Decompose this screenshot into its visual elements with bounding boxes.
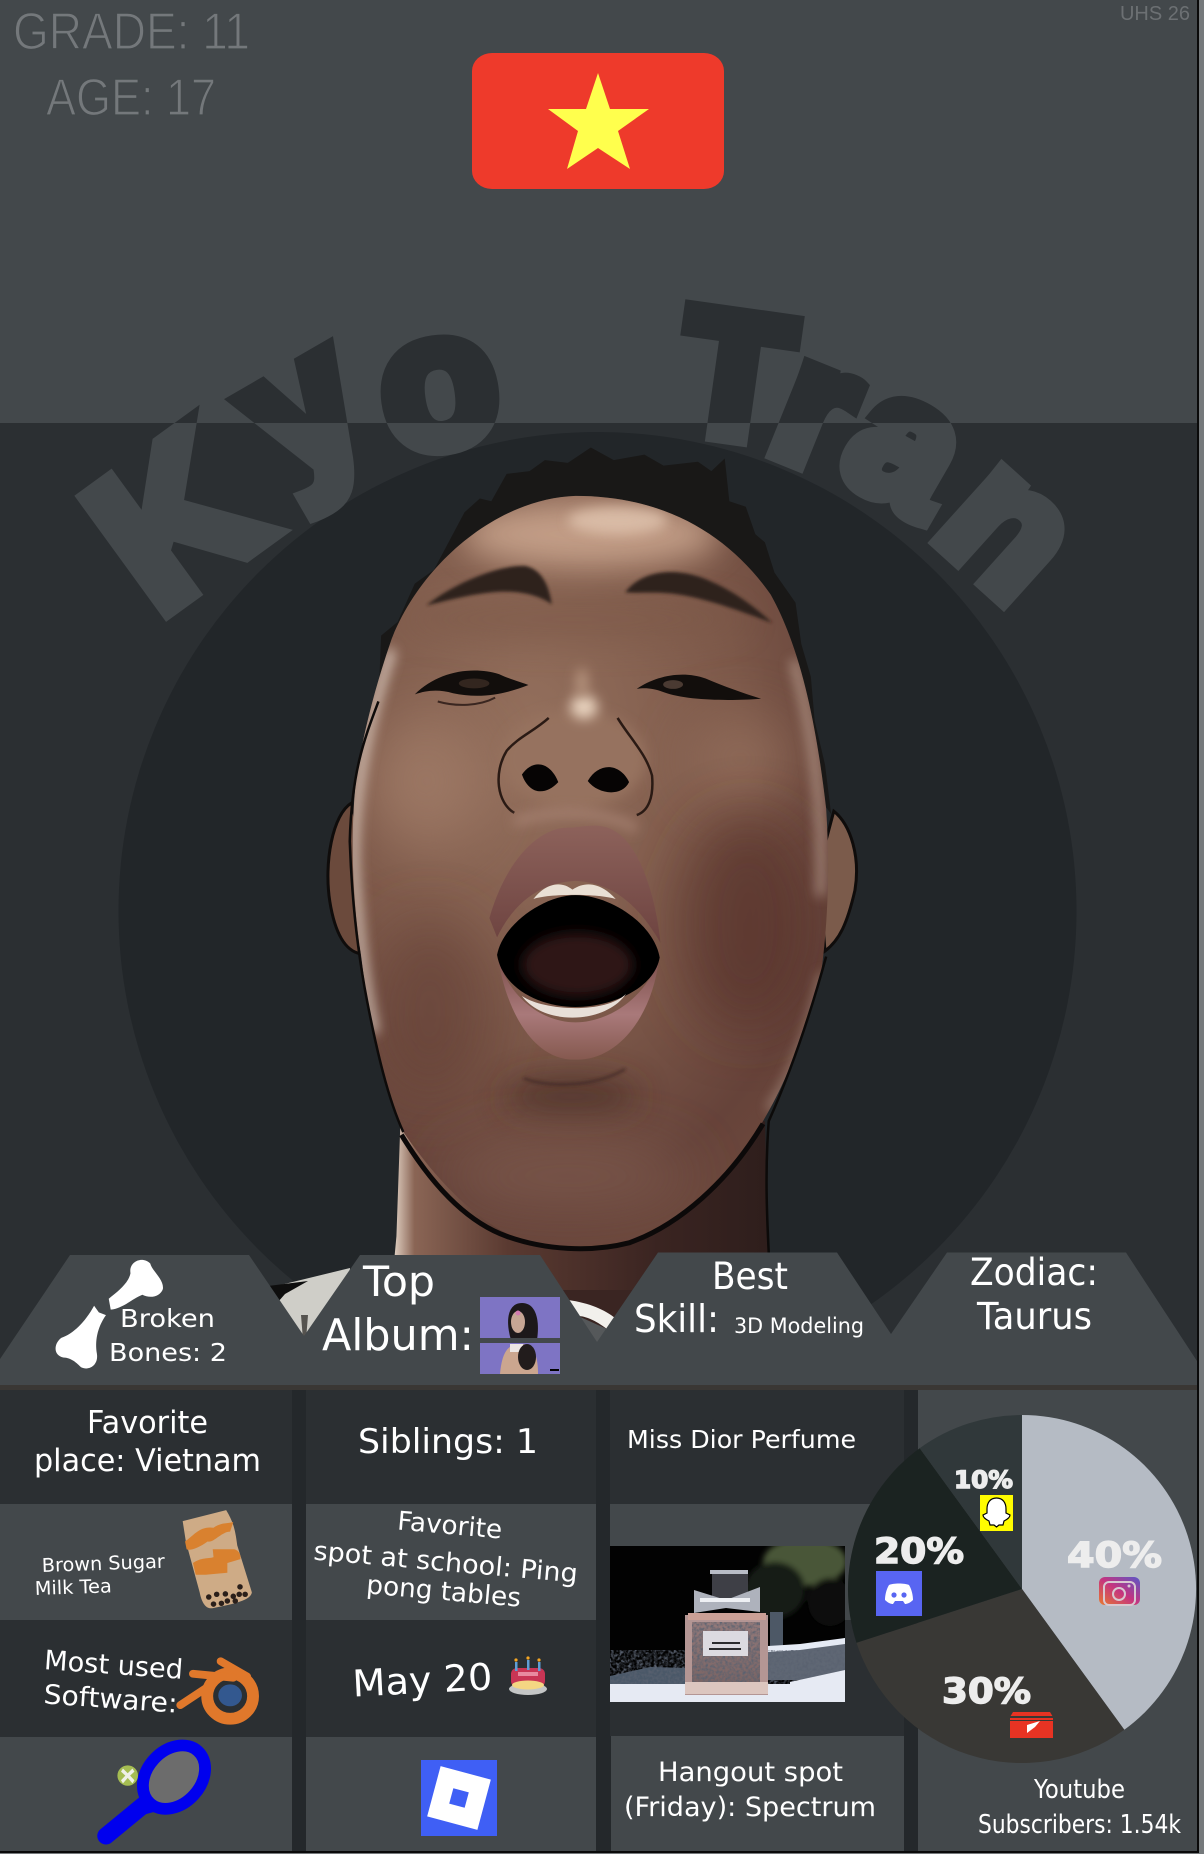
grid cell: hangout spot: Hangout spot (658, 1757, 843, 1788)
neck (392, 1121, 773, 1329)
tab: top album: Top (362, 1257, 435, 1306)
label: 30%: 30% (942, 1672, 1031, 1712)
icon: blender logo (180, 1661, 253, 1719)
shirt (268, 1268, 640, 1345)
youtube subscribers caption (978, 1775, 1181, 1840)
tab: best skill: Best (712, 1255, 788, 1298)
grid cell: favorite spot: Favorite (396, 1507, 503, 1546)
grid cell: birthday (306, 1620, 596, 1737)
icon: Discord (876, 1571, 922, 1616)
grid cell: milk tea: Milk Tea (34, 1575, 112, 1600)
curved name: Kyo Tran: y (204, 290, 397, 521)
tab: broken bones: Bones: 2 (109, 1338, 227, 1367)
grid cell: most used software: Software: (43, 1679, 179, 1720)
portrait: stylised face (328, 448, 857, 1329)
grid cell: favorite spot: pong tables (365, 1570, 522, 1614)
tab: top album (322, 1257, 560, 1374)
grid cell: birthday: May 20 (351, 1655, 493, 1706)
pie chart: social media use (848, 1415, 1196, 1763)
right frame line (1197, 0, 1199, 1853)
face shading (354, 500, 822, 1209)
upper lip (489, 826, 660, 943)
grid cell: perfume name: Miss Dior Perfume (627, 1425, 856, 1454)
upper background panel (0, 0, 1198, 423)
face outline (350, 701, 403, 1132)
grid cell: milk tea: Brown Sugar (41, 1551, 165, 1577)
tab: zodiac: Zodiac: (970, 1251, 1098, 1294)
jaw line (401, 1124, 763, 1249)
tab: broken bones: Broken (120, 1304, 215, 1333)
tab: best skill (634, 1255, 864, 1341)
label: 20%: 20% (874, 1532, 964, 1572)
grid cell: most used software: Most used (43, 1645, 184, 1686)
grid cell: favorite place: place: Vietnam (34, 1443, 261, 1479)
grid cell: roblox (306, 1737, 596, 1851)
youtube subscribers caption: Youtube (1033, 1775, 1125, 1805)
curved name: Kyo Tran: a (815, 331, 1004, 556)
icon: Vietnam flag (472, 53, 724, 189)
icon: broken bones (56, 1260, 163, 1368)
icon: boba cup (183, 1510, 252, 1608)
right neck edge (767, 957, 826, 1253)
grid cell: perfume photo (610, 1504, 870, 1702)
school year tag: UHS 26 (1120, 3, 1190, 25)
tab: broken bones (109, 1304, 227, 1367)
grid cell: pie background (918, 1390, 1197, 1851)
bottom frame line (0, 1851, 1199, 1853)
nose (499, 668, 652, 815)
grid cell: siblings: Siblings: 1 (358, 1422, 538, 1462)
mouth interior (497, 895, 660, 1007)
label: 10%: 10% (954, 1466, 1013, 1494)
tab band (0, 1252, 1197, 1385)
grid cell: tennis (0, 1733, 292, 1851)
left ear (328, 803, 367, 954)
icon: YouTube (1010, 1712, 1053, 1738)
icon: cake (509, 1656, 547, 1695)
grid cell: favorite place (0, 1390, 292, 1504)
grid cell: hangout spot: (Friday): Spectrum (624, 1792, 876, 1823)
left eye (415, 670, 528, 705)
curved name: Kyo Tran: T (668, 272, 802, 481)
slice: Discord 20% (848, 1448, 1022, 1643)
right eye (637, 675, 761, 700)
hair (378, 448, 831, 814)
grid cell: milk tea (0, 1504, 292, 1620)
album cover (480, 1297, 560, 1374)
icon: Snapchat (980, 1495, 1013, 1531)
grid cell: favorite spot: spot at school: Ping (312, 1537, 579, 1590)
left brow (426, 566, 552, 606)
right brow (625, 572, 773, 623)
grade label: GRADE: 11 (13, 3, 250, 61)
curved name: Kyo Tran: n (904, 414, 1120, 637)
right ear (818, 811, 857, 951)
grid cell: siblings (306, 1390, 596, 1504)
icon: Instagram (1099, 1577, 1140, 1605)
grid cell: favorite place: Favorite (87, 1405, 208, 1441)
grid cell: favorite spot (306, 1504, 596, 1620)
curved name: Kyo Tran: r (750, 303, 887, 510)
mouth (489, 813, 660, 1084)
slice: YouTube 30% (856, 1589, 1124, 1763)
curved name: Kyo Tran: o (366, 268, 510, 494)
icon: tennis racket (106, 1733, 218, 1836)
slice: Snapchat 10% (920, 1415, 1022, 1589)
upper teeth (533, 884, 616, 899)
divider under tabs (0, 1385, 1198, 1390)
grid cell: perfume name (610, 1390, 904, 1504)
grid background (0, 1390, 1198, 1851)
lower background panel (0, 423, 1198, 1393)
grid cell: hangout spot (611, 1736, 904, 1851)
face base (353, 496, 828, 1248)
slice: Instagram 40% (1022, 1415, 1196, 1730)
curved name: Kyo Tran: K (49, 384, 300, 653)
curved name: Kyo Tran (49, 268, 1120, 653)
lower lip (498, 959, 659, 1060)
tab: best skill: Skill: (634, 1297, 719, 1341)
icon: roblox logo (421, 1760, 497, 1836)
tab: top album: Album: (322, 1310, 474, 1361)
tab: zodiac: Taurus (976, 1295, 1092, 1338)
tab: best skill: 3D Modeling (734, 1314, 864, 1338)
lower teeth (522, 994, 626, 1018)
label: 40%: 40% (1067, 1536, 1162, 1576)
grid cell: most used software (0, 1620, 292, 1737)
backdrop circle (118, 432, 1076, 1390)
tab: zodiac (970, 1251, 1098, 1338)
perfume image (610, 1538, 852, 1702)
age label: AGE: 17 (46, 69, 216, 127)
